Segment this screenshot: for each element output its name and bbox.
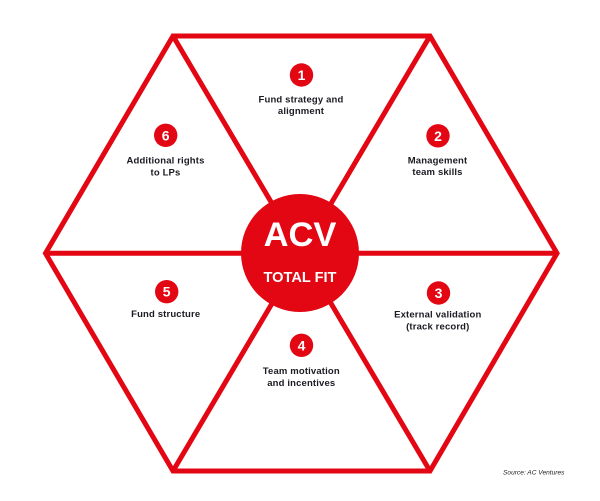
segment 5: Fund structure: [131, 280, 200, 320]
segment 6: Additional rights to LPs: 6: [162, 127, 170, 143]
segment 4: Team motivation and incentives: 4: [298, 337, 306, 353]
segment 3: External validation: 3: [435, 285, 443, 301]
segment 5: Fund structure: 5: [163, 284, 171, 300]
segment 4: Team motivation and incentives: Team motivation: [263, 366, 340, 377]
segment 6: Additional rights to LPs: to LPs: [151, 168, 180, 178]
hexagon frame with spokes: [46, 36, 557, 471]
segment 4: Team motivation and incentives: [263, 334, 340, 389]
segment 1: Fund strategy and alignment: 1: [298, 67, 306, 83]
center circle: ACV total fit: TOTAL FIT: [264, 270, 337, 286]
segment 2: Management team skills: [408, 124, 468, 178]
segment 1: Fund strategy and alignment: alignment: [278, 106, 325, 117]
segment 6: Additional rights to LPs: [126, 124, 205, 178]
segment 2: Management team skills: Management: [408, 155, 468, 166]
segment 2: Management team skills: team skills: [412, 167, 463, 178]
segment 2: Management team skills: 2: [434, 128, 442, 144]
center circle: ACV total fit: ACV: [264, 216, 336, 254]
segment 3: External validation: External validation: [394, 310, 482, 321]
segment 3: External validation: [394, 281, 482, 332]
segment 1: Fund strategy and alignment: [259, 63, 343, 117]
center circle: ACV total fit: [241, 194, 359, 312]
source note: Source: AC Ventures: [503, 470, 565, 476]
segment 3: External validation: (track record): [406, 322, 469, 332]
segment 4: Team motivation and incentives: and incentives: [267, 378, 335, 389]
segment 6: Additional rights to LPs: Additional rights: [126, 155, 205, 166]
segment 5: Fund structure: Fund structure: [131, 309, 200, 320]
segment 1: Fund strategy and alignment: Fund strategy and: [259, 94, 343, 106]
